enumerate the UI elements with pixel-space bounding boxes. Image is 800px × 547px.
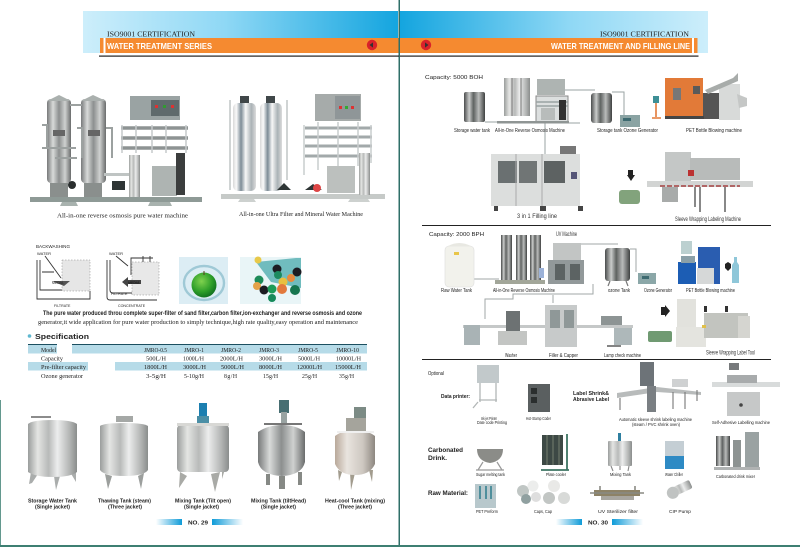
certification label: ISO9001 CERTIFICATION [107,30,196,38]
carbonated drink label [428,447,463,462]
caption: shrink wrapping: Sleeve Wrapping Label Tool [706,350,755,356]
specification table: JMRO-10 [336,348,359,354]
divider line [422,225,771,226]
line 2 upper captions: All-in-One Reverse Osmosis Machine [493,288,555,294]
printer captions: Date code Printing [477,420,507,426]
specification heading: Specification [35,332,89,341]
carbonated captions: Carbonated drink mixer [716,474,755,480]
tank captions: Mixing Tank (tiltHead) [251,498,306,504]
shrink wrapping machine [676,299,750,347]
label shrink heading [573,391,609,403]
carbonated captions: Mixing Tank [610,472,631,478]
right section title: WATER TREATMENT AND FILLING LINE [551,41,690,51]
printer captions: Hot-Stamp Coder [526,416,551,422]
line 2 upper captions: Ozone Generator [644,288,672,294]
arrow: compressor to shrink wrapper [661,305,670,317]
specification table: 500L/H [146,356,167,362]
carbonated drink label: Drink. [428,455,447,462]
tank captions: (Single jacket) [184,504,219,510]
page number 30 [556,519,643,526]
water treatment schematic diagrams: WATER [109,251,123,256]
specification table: 5000L/H [221,365,245,371]
specification table: JMRO-0.5 [144,348,167,354]
capacity label 2000 BPH: Capacity: 2000 BPH [429,232,484,238]
bottle caps [517,480,570,504]
specification table: 10000L/H [336,356,362,362]
UV machine caption: UV Machine [556,232,577,238]
label machine captions: (steam / PVC shrink oven) [632,422,680,428]
specification table: 5000L/H [298,356,321,362]
specification table: 3000L/H [183,365,207,371]
description paragraph [38,311,363,326]
raw material captions [476,509,691,515]
specification table: Model [41,348,57,354]
divider line [422,359,771,360]
3-in-1 filling machine [491,146,583,211]
right page header [400,11,708,57]
specification table: 5-10g/H [184,374,205,380]
chiller [665,441,684,469]
storage water tank [464,92,485,122]
PET preform [475,484,496,508]
air compressor [619,190,640,204]
tank captions: Storage Water Tank [28,498,77,504]
tank captions: Heat-cool Tank (mixing) [325,498,385,504]
caption: mineral water machine: All-in-one Ultra Filter and Mineral Water Machine [239,211,363,218]
tank captions: (Single jacket) [35,504,70,510]
tank: mixing tank sealed [258,400,305,489]
page number 29 [156,519,243,526]
capacity label 5000 BPH: Capacity: 5000 BOH [425,75,483,81]
line 2 upper captions: Raw Water Tank [441,288,472,294]
certification label: ISO9001 CERTIFICATION [600,30,690,38]
water treatment schematic diagrams: FILTRATE [54,304,71,308]
reverse osmosis machine [548,243,584,284]
specification table: 1000L/H [183,356,205,362]
specification table: JMRO-2 [221,348,241,354]
reverse osmosis machine photo [30,95,202,206]
three filter tanks [495,235,545,284]
specification table: 3-5g/H [146,374,167,380]
raw material captions: CIP Pump [669,509,691,515]
water treatment schematic diagrams [36,244,159,308]
water treatment schematic diagrams: MEDIA [128,281,140,285]
label machine captions: Automatic sleeve shrink labeling machine [619,417,692,423]
tank captions: (Three jacket) [108,504,142,510]
line 2 lower captions: Washer [505,353,517,359]
process line 1: pipes [485,90,624,154]
caption: sleeve wrapping: Sleeve Wrapping Labeling Machine [675,217,741,223]
specification table: Pre-filter capacity [41,364,86,371]
line 1 captions [454,128,742,134]
specification table: 8g/H [224,374,238,380]
line 2 upper captions: PET Bottle Blowing machine [686,288,735,294]
semi-auto blow machine and bottle [678,241,739,284]
page number 29: NO. 29 [188,520,209,526]
specification table: 1800L/H [144,365,168,371]
tank: thawing tank [100,416,148,489]
UV sterilizer [590,486,644,500]
raw material captions: UV Sterilizer filter [598,509,638,515]
specification table: JMRO-3 [259,348,279,354]
tank captions: (Single jacket) [261,504,296,510]
plate exchanger [541,434,569,470]
tank captions: Mixing Tank (Tilt open) [175,498,231,504]
specification table: 3000L/H [259,356,283,362]
carbonated captions: Plate cooler [546,472,566,478]
line 2 lower captions [505,353,641,359]
tank captions [28,498,385,510]
carbonated captions [476,472,755,480]
water treatment schematic diagrams: BACKWASHING [36,244,70,249]
printer captions: Ink-jet Printer [481,416,497,422]
tank: storage water tank [28,417,77,490]
specification table: 35g/H [339,374,355,380]
label shrinking machine [617,362,701,412]
white storage water tank [445,243,474,287]
line 2 lower captions: Lamp check machine [604,353,641,359]
specification table: 15000L/H [335,365,362,371]
optional label: Optional [428,371,444,377]
specification table: 25g/H [302,374,318,380]
carbonated captions: Sugar melting tank [476,472,505,478]
page number 30: NO. 30 [588,520,608,526]
centrifugal pump [665,479,694,501]
pipes for line 2 [474,244,636,319]
left page header [83,11,399,57]
sterilizing water tank [591,93,612,123]
ink jet printer [473,365,499,408]
mineral water machine photo [221,94,385,202]
specification table [28,344,367,380]
label shrink heading: Abrasive Label [573,397,609,403]
photo: green apple splash [179,257,228,304]
mixing tank [608,433,632,471]
hot coding printer [528,384,550,412]
specification table: 15g/H [263,374,279,380]
bottling line conveyor and machines [463,305,633,347]
label machine captions: Self-Adhesive Labelling machine [712,420,770,426]
specification table: JMRO-1 [184,348,204,354]
line 1 captions: Storage tank Ozone Generator [597,128,658,134]
carbonated captions: Water Chiller [665,472,683,478]
photo: colourful fruit [240,256,302,304]
carbonated drink mixer [714,432,760,470]
specification table: Capacity [41,356,63,362]
caption: 3-in-1 filling: 3 in 1 Filling line [517,214,558,220]
label machine captions [619,417,770,428]
specification table: 12000L/H [297,365,323,371]
water treatment schematic diagrams: CONCENTRATE [118,304,146,308]
water treatment schematic diagrams: WATER [37,251,51,256]
PET bottle blowing machine [652,73,747,120]
all-in-one reverse osmosis machine [497,78,569,124]
line 1 captions: PET Bottle Blowing machine [686,128,742,134]
specification table: 8000L/H [259,365,283,371]
specification table: JMRO-5 [298,348,318,354]
line 2 upper captions: ozone Tank [608,288,630,294]
sugar melting tank [476,449,504,470]
tank captions: Thawing Tank (steam) [98,498,151,504]
line 1 captions: All-in-One Reverse Osmosis Machine [495,128,565,134]
printer captions [477,416,551,426]
water treatment schematic diagrams: MEDIA [52,281,64,285]
sterilizing tank [605,248,630,286]
ozone generator [620,115,640,127]
specification table: Ozone generator [41,374,83,380]
label shrink heading: Label Shrink& [573,391,609,397]
caption: reverse osmosis machine: All-in-one reverse osmosis pure water machine [57,212,188,220]
raw material captions: Caps, Cap [534,509,552,515]
description paragraph: The pure water produced throu complete super-filter of sand filter,carbon filter,ion-exchanger and reverse osmosis and ozone [43,311,363,317]
tank: heat-cool tank [335,407,375,490]
sleeve wrapping label machine [647,152,753,212]
line 1 captions: Storage water tank [454,128,490,134]
carbonated drink label: Carbonated [428,447,463,454]
icon: next arrow [421,40,431,50]
labeling machine with touch screen [712,363,780,416]
left section title: WATER TREATMENT SERIES [107,41,212,51]
arrow: compressor to shrink wrapper [627,170,635,181]
ozone generator [638,273,656,284]
data printer label: Data printer: [441,394,470,400]
raw material captions: PET Preform [476,509,498,515]
tank captions: (Three jacket) [338,504,372,510]
specification table: 2000L/H [220,356,244,362]
description paragraph: generator,it wide application for pure water production to simply technique,high rate quality,easy operation and maintenance [38,319,358,326]
icon: previous arrow [367,40,377,50]
water treatment schematic diagrams: FILTRATE [111,292,128,296]
air compressor [648,331,672,342]
line 2 lower captions: Filler & Capper [549,353,578,359]
raw material label: Raw Material: [428,491,468,497]
line 2 upper captions [441,288,735,294]
tank: mixing tank open [177,403,229,492]
